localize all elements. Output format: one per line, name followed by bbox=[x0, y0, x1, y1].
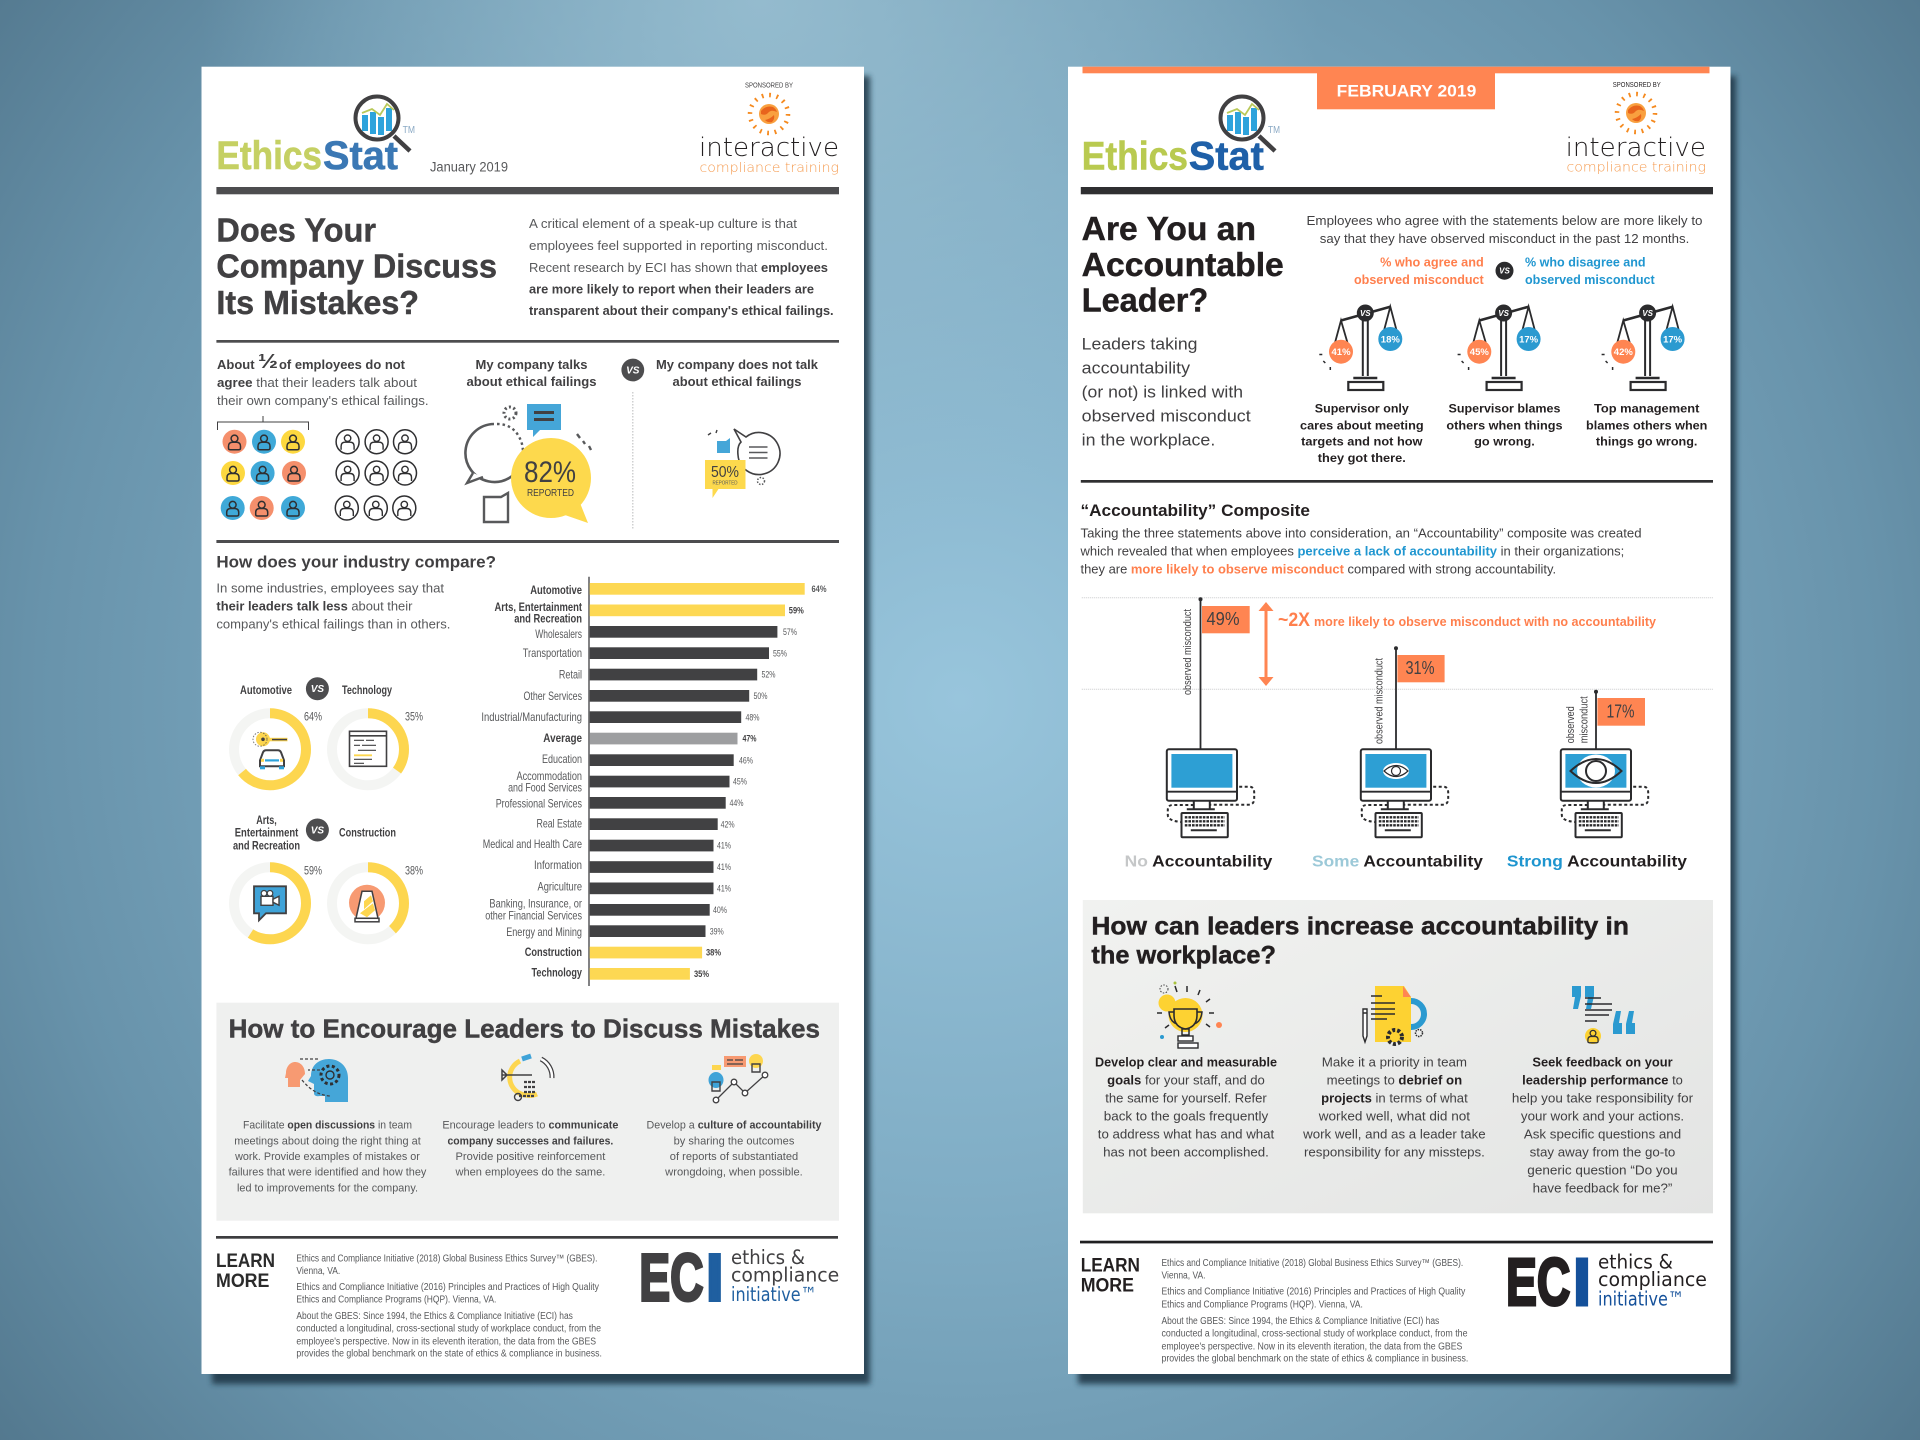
chart category labels: Agriculture bbox=[538, 880, 582, 894]
logo: ECI: compliance bbox=[731, 1264, 839, 1287]
chart category labels: Transportation bbox=[523, 646, 582, 660]
people icon grid bbox=[218, 416, 416, 520]
text: debrief on projects bbox=[1302, 1056, 1486, 1160]
donut: technology 35% bbox=[332, 709, 423, 785]
text: seek feedback: Ask specific questions and bbox=[1524, 1128, 1681, 1142]
scale 2: supervisor blames: 17% bbox=[1519, 334, 1539, 346]
comparison: arts vs construction: VS bbox=[311, 826, 324, 836]
chart category labels: Energy and Mining bbox=[506, 925, 582, 939]
title bbox=[1082, 210, 1284, 319]
references: Vienna, VA. bbox=[296, 1266, 340, 1277]
sponsor logo: interactive compliance training: SPONSORED BY bbox=[1613, 80, 1661, 89]
references: employee's perspective. Now in its eleventh iteration, the data from the GBES bbox=[1162, 1341, 1463, 1352]
title: Company Discuss bbox=[216, 248, 497, 284]
chart category labels: Real Estate bbox=[536, 817, 582, 831]
intro paragraph bbox=[529, 216, 834, 318]
logo: EthicsStat January: Ethics bbox=[216, 134, 322, 178]
stat text: about half of employees: their own company's ethical failings. bbox=[217, 393, 429, 408]
text block: industry intro: In some industries, employees say that bbox=[216, 581, 444, 596]
title bbox=[216, 212, 497, 321]
learn more label bbox=[216, 1251, 275, 1292]
callout: 2X more likely: more likely to observe misconduct with no accountability bbox=[1314, 615, 1656, 629]
chart value labels: 64% bbox=[812, 584, 826, 594]
heading: company does not talk: about ethical failings bbox=[672, 374, 802, 389]
scale 2: supervisor blames bbox=[1446, 304, 1563, 449]
references: Ethics and Compliance Initiative (2018) Global Business Ethics Survey™ (GBES). bbox=[296, 1254, 597, 1265]
comparison: arts vs construction: Construction bbox=[339, 826, 396, 840]
chart category labels: Banking, Insurance, or bbox=[489, 896, 582, 910]
logo: EthicsStat February: Ethics bbox=[1082, 134, 1188, 178]
text: culture of accountability: by sharing the outcomes bbox=[674, 1135, 795, 1147]
chart value labels: 50% bbox=[754, 691, 768, 701]
graphic: 50% reported: REPORTED bbox=[712, 480, 738, 486]
icon: heads with gear bbox=[285, 1059, 348, 1102]
chart value labels: 38% bbox=[706, 948, 721, 958]
legend: % who disagree and bbox=[1525, 256, 1646, 270]
intro paragraph: transparent about their company's ethical failings. bbox=[529, 303, 834, 318]
title: Does Your bbox=[216, 212, 376, 249]
page shadows bbox=[212, 76, 1736, 1384]
text block: industry intro bbox=[216, 581, 450, 631]
flag chart: strong accountability 17%: 17% bbox=[1606, 701, 1634, 721]
logo: ECI: initiative™ bbox=[1598, 1288, 1684, 1311]
chart category labels: other Financial Services bbox=[485, 908, 582, 922]
intro paragraph: employees feel supported in reporting misconduct. bbox=[529, 238, 828, 253]
learn more label bbox=[1081, 1256, 1140, 1297]
text: debrief on projects: responsibility for any missteps. bbox=[1304, 1146, 1485, 1160]
graphic: 82% reported bbox=[465, 404, 591, 523]
logo: EthicsStat January: TM bbox=[403, 125, 415, 136]
chart value labels: 44% bbox=[730, 798, 744, 808]
chart bars bbox=[590, 583, 805, 980]
scale 1: supervisor only cares: they got there. bbox=[1318, 451, 1406, 465]
panel: how to encourage leaders bbox=[216, 1003, 839, 1221]
title: Are You an bbox=[1082, 210, 1256, 247]
chart value labels: 35% bbox=[694, 969, 709, 979]
flag chart: some accountability 31% bbox=[1361, 646, 1448, 837]
scale 1: supervisor only cares: 41% bbox=[1331, 347, 1351, 358]
logo: EthicsStat January: Stat bbox=[323, 134, 398, 178]
intro paragraph: are more likely to report when their leaders are bbox=[529, 282, 814, 296]
scale 3: top management blames: Top management bbox=[1594, 402, 1699, 416]
legend: % who agree and bbox=[1380, 256, 1484, 270]
text: clear goals: has not been accomplished. bbox=[1103, 1146, 1269, 1160]
comparison: automotive vs technology bbox=[234, 677, 423, 785]
text: debrief on projects: meetings to debrief on bbox=[1327, 1074, 1462, 1088]
logo: ECI: ethics & bbox=[731, 1246, 805, 1269]
flag chart: strong accountability 17%: misconduct bbox=[1579, 696, 1591, 743]
intro text: Employees who agree with the statements below are more likely to bbox=[1306, 213, 1702, 228]
chart value labels: 47% bbox=[742, 734, 756, 744]
chart category labels bbox=[481, 583, 582, 980]
text: culture of accountability: wrongdoing, when possible. bbox=[664, 1167, 803, 1179]
heading: accountability composite: “Accountability” Composite bbox=[1080, 502, 1310, 520]
chart value labels: 57% bbox=[783, 627, 797, 637]
chart category labels: and Recreation bbox=[514, 612, 582, 626]
text block: composite description bbox=[1079, 526, 1642, 576]
references: provides the global benchmark on the state of ethics & compliance in business. bbox=[1162, 1354, 1468, 1365]
stat text: about half of employees: of employees do not bbox=[279, 357, 406, 372]
stat text: about half of employees: About bbox=[217, 357, 255, 372]
logo: EthicsStat January bbox=[216, 96, 415, 178]
chart value labels: 59% bbox=[789, 606, 804, 616]
chart category labels: Automotive bbox=[530, 583, 582, 597]
text: seek feedback: have feedback for me?” bbox=[1533, 1182, 1672, 1196]
flag chart: strong accountability 17%: observed bbox=[1565, 706, 1577, 743]
text: open discussions bbox=[229, 1120, 427, 1194]
comparison: automotive vs technology: Technology bbox=[342, 683, 392, 697]
scale 2: supervisor blames: go wrong. bbox=[1474, 435, 1535, 449]
icon: trophy bbox=[1157, 982, 1222, 1048]
text: debrief on projects: work well, and as a leader take bbox=[1302, 1128, 1486, 1142]
chart category labels: Retail bbox=[559, 668, 582, 682]
scale 1: supervisor only cares bbox=[1300, 304, 1424, 465]
text: open discussions: led to improvements for the company. bbox=[237, 1182, 418, 1194]
chart category labels: Other Services bbox=[524, 689, 582, 703]
scale 1: supervisor only cares: VS bbox=[1360, 309, 1371, 318]
chart category labels: Wholesalers bbox=[535, 627, 582, 641]
text block: industry intro: company's ethical failings than in others. bbox=[216, 616, 450, 631]
chart value labels bbox=[694, 584, 826, 979]
text: seek feedback: help you take responsibility for bbox=[1512, 1092, 1693, 1106]
logo: EthicsStat February: TM bbox=[1268, 125, 1280, 136]
donut: arts 59%: 59% bbox=[304, 863, 322, 877]
references: About the GBES: Since 1994, the Ethics & Compliance Initiative (ECI) has bbox=[296, 1311, 573, 1322]
caption: strong accountability: Strong Accountability bbox=[1507, 854, 1687, 871]
logo: ECI bbox=[639, 1240, 839, 1316]
text: communicate successes bbox=[442, 1120, 618, 1179]
chart value labels: 55% bbox=[773, 648, 787, 658]
text: debrief on projects: Make it a priority in team bbox=[1322, 1056, 1467, 1070]
chart category labels: Professional Services bbox=[496, 797, 582, 811]
text: culture of accountability: Develop a culture of accountability bbox=[646, 1120, 822, 1132]
panel heading: How can leaders increase accountability in bbox=[1091, 912, 1629, 940]
vs badge: VS bbox=[626, 366, 640, 376]
sponsor logo: interactive compliance training: interactive bbox=[699, 133, 839, 163]
scale 3: top management blames bbox=[1586, 304, 1707, 449]
text: seek feedback bbox=[1512, 1056, 1693, 1196]
text: debrief on projects: projects in terms of what bbox=[1321, 1092, 1468, 1106]
title: Leader? bbox=[1082, 282, 1208, 319]
panel: February 2019 infographic page bbox=[1068, 67, 1730, 1374]
icon: quotes and feedback bbox=[1572, 986, 1635, 1044]
text: open discussions: work. Provide examples of mistakes or bbox=[234, 1151, 420, 1163]
chart value labels: 40% bbox=[713, 905, 727, 915]
graphic: 50% reported: 50% bbox=[711, 464, 739, 481]
icon: light bulbs and line chart bbox=[708, 1054, 768, 1103]
logo: ECI: I bbox=[1573, 1245, 1591, 1320]
sponsor logo: interactive compliance training bbox=[699, 80, 839, 176]
references: Ethics and Compliance Initiative (2016) Principles and Practices of High Quality bbox=[1162, 1287, 1465, 1298]
chart category labels: and Food Services bbox=[508, 781, 582, 795]
learn more label: MORE bbox=[216, 1271, 269, 1292]
heading: company talks: about ethical failings bbox=[466, 374, 596, 389]
legend bbox=[1354, 256, 1656, 287]
flag chart: some accountability 31%: 31% bbox=[1406, 658, 1434, 678]
scale 3: top management blames: things go wrong. bbox=[1596, 435, 1697, 449]
banner: February 2019 bbox=[1082, 67, 1710, 109]
logo: ECI: EC bbox=[1506, 1245, 1570, 1320]
scale 3: top management blames: 42% bbox=[1614, 347, 1633, 358]
caption: some accountability: Some Accountability bbox=[1312, 854, 1483, 871]
sponsor logo: interactive compliance training: interactive bbox=[1566, 133, 1706, 163]
logo: ECI: ethics & bbox=[1598, 1250, 1673, 1273]
subtitle bbox=[1082, 334, 1251, 450]
stat text: about half of employees: agree that their leaders talk about bbox=[217, 375, 417, 390]
icon: document and gears bbox=[1363, 986, 1424, 1044]
text: seek feedback: your work and your actions. bbox=[1521, 1110, 1684, 1124]
flag chart: some accountability 31%: observed misconduct bbox=[1374, 658, 1386, 744]
subtitle: Leaders taking bbox=[1082, 334, 1198, 353]
references: About the GBES: Since 1994, the Ethics & Compliance Initiative (ECI) has bbox=[1162, 1316, 1439, 1327]
subtitle: (or not) is linked with bbox=[1082, 382, 1243, 401]
callout: 2X more likely: ~2X bbox=[1278, 610, 1310, 631]
flag chart: strong accountability 17% bbox=[1561, 690, 1648, 837]
text block: industry intro: their leaders talk less about their bbox=[216, 599, 413, 614]
legend: observed misconduct bbox=[1525, 273, 1656, 287]
sponsor logo: interactive compliance training: SPONSORED BY bbox=[745, 80, 793, 90]
text: open discussions: meetings about doing the right thing at bbox=[234, 1135, 421, 1147]
graphic: 82% reported: 82% bbox=[524, 456, 576, 489]
chart value labels: 48% bbox=[746, 712, 760, 722]
heading: industry compare: How does your industry compare? bbox=[216, 554, 496, 572]
callout: 2X more likely bbox=[1278, 610, 1656, 631]
references: conducted a longitudinal, cross-sectional study of workplace conduct, from the bbox=[1162, 1329, 1468, 1340]
text: seek feedback: Seek feedback on your bbox=[1532, 1056, 1673, 1070]
references: Ethics and Compliance Programs (HQP). Vienna, VA. bbox=[296, 1295, 496, 1306]
chart value labels: 41% bbox=[717, 884, 731, 894]
scale 1: supervisor only cares: targets and not how bbox=[1301, 435, 1423, 449]
donut: technology 35%: 35% bbox=[405, 709, 423, 723]
chart category labels: Medical and Health Care bbox=[483, 837, 582, 851]
logo: ECI: compliance bbox=[1598, 1268, 1707, 1291]
scale 3: top management blames: VS bbox=[1642, 309, 1654, 318]
issue date: January 2019 bbox=[430, 160, 508, 175]
chart value labels: 52% bbox=[762, 670, 776, 680]
references: conducted a longitudinal, cross-sectional study of workplace conduct, from the bbox=[296, 1324, 601, 1335]
text: clear goals bbox=[1095, 1056, 1277, 1160]
panel heading: How to Encourage Leaders to Discuss Mistakes bbox=[229, 1014, 820, 1044]
subtitle: accountability bbox=[1082, 358, 1191, 377]
title: Its Mistakes? bbox=[216, 284, 419, 321]
text block: composite description: they are more likely to observe misconduct compared with strong accountability. bbox=[1080, 562, 1556, 576]
arrow: 2X difference bbox=[1258, 602, 1274, 686]
chart category labels: Industrial/Manufacturing bbox=[481, 710, 582, 724]
donut: arts 59% bbox=[234, 863, 322, 939]
graphic: 50% reported bbox=[705, 429, 780, 498]
text: clear goals: back to the goals frequently bbox=[1104, 1110, 1269, 1124]
chart category labels: Information bbox=[534, 858, 582, 872]
text: clear goals: the same for yourself. Refer bbox=[1105, 1092, 1267, 1106]
intro paragraph: Recent research by ECI has shown that employees bbox=[529, 260, 828, 275]
sponsor logo: interactive compliance training: compliance training bbox=[1566, 160, 1706, 176]
heading: company does not talk: My company does not talk bbox=[656, 357, 819, 372]
sponsor logo: interactive compliance training bbox=[1566, 80, 1706, 176]
text: communicate successes: Encourage leaders to communicate bbox=[442, 1120, 618, 1132]
scale 1: supervisor only cares: cares about meeting bbox=[1300, 418, 1424, 432]
text: debrief on projects: worked well, what did not bbox=[1318, 1110, 1471, 1124]
legend: observed misconduct bbox=[1354, 273, 1485, 287]
legend: VS bbox=[1499, 267, 1510, 276]
text: culture of accountability bbox=[646, 1120, 822, 1179]
logo: EthicsStat February bbox=[1082, 96, 1280, 178]
heading: company talks: My company talks bbox=[476, 357, 588, 372]
text: open discussions: Facilitate open discussions in team bbox=[243, 1120, 412, 1132]
panel: January 2019 infographic page bbox=[202, 67, 864, 1374]
chart value labels: 42% bbox=[721, 819, 735, 829]
references bbox=[1162, 1258, 1468, 1365]
intro paragraph: A critical element of a speak-up culture is that bbox=[529, 216, 797, 231]
scale 2: supervisor blames: 45% bbox=[1470, 347, 1489, 358]
references: Ethics and Compliance Initiative (2016) Principles and Practices of High Quality bbox=[296, 1282, 599, 1293]
references: Ethics and Compliance Initiative (2018) Global Business Ethics Survey™ (GBES). bbox=[1162, 1258, 1463, 1269]
chart value labels: 46% bbox=[739, 755, 753, 765]
vs badge bbox=[621, 359, 644, 381]
chart category labels: Arts, Entertainment bbox=[494, 600, 582, 614]
text block: composite description: which revealed that when employees perceive a lack of accountability in their organizations; bbox=[1079, 544, 1624, 558]
chart category labels: Education bbox=[542, 752, 582, 766]
text: seek feedback: stay away from the go-to bbox=[1530, 1146, 1675, 1160]
text: culture of accountability: of reports of substantiated bbox=[670, 1151, 798, 1163]
scale 1: supervisor only cares: 18% bbox=[1381, 334, 1400, 346]
text: seek feedback: generic question “Do you bbox=[1527, 1164, 1678, 1178]
logo: ECI: EC bbox=[639, 1240, 704, 1316]
comparison: automotive vs technology: VS bbox=[311, 684, 324, 695]
chart value labels: 41% bbox=[717, 862, 731, 872]
flag chart: no accountability 49%: observed misconduct bbox=[1182, 609, 1194, 695]
stat text: about half of employees: ½ bbox=[258, 351, 278, 373]
caption: no accountability: No Accountability bbox=[1125, 854, 1273, 871]
title: Accountable bbox=[1082, 246, 1284, 283]
icon: target ring bbox=[502, 1056, 552, 1100]
references: Ethics and Compliance Programs (HQP). Vienna, VA. bbox=[1162, 1299, 1363, 1310]
learn more label: LEARN bbox=[1081, 1256, 1140, 1277]
scale 3: top management blames: blames others when bbox=[1586, 418, 1707, 432]
logo: ECI bbox=[1506, 1245, 1707, 1320]
intro text bbox=[1306, 213, 1702, 246]
references: Vienna, VA. bbox=[1162, 1270, 1206, 1281]
comparison: arts vs construction: Entertainment bbox=[235, 826, 298, 840]
scale 2: supervisor blames: VS bbox=[1498, 309, 1510, 318]
scale 2: supervisor blames: Supervisor blames bbox=[1449, 402, 1561, 416]
heading: company talks bbox=[466, 357, 596, 389]
text: communicate successes: Provide positive reinforcement bbox=[456, 1151, 605, 1163]
comparison: automotive vs technology: Automotive bbox=[240, 683, 292, 697]
text: clear goals: goals for your staff, and do bbox=[1107, 1074, 1265, 1088]
text: clear goals: Develop clear and measurable bbox=[1095, 1056, 1277, 1070]
comparison: arts vs construction bbox=[233, 813, 423, 939]
references bbox=[296, 1254, 602, 1360]
learn more label: MORE bbox=[1081, 1276, 1134, 1297]
banner: February 2019: FEBRUARY 2019 bbox=[1337, 83, 1476, 101]
chart category labels: Construction bbox=[525, 945, 582, 959]
text block: composite description: Taking the three statements above into consideration, an “Accountability” composite was created bbox=[1080, 526, 1642, 540]
stat text: about half of employees bbox=[217, 351, 429, 408]
scale 2: supervisor blames: others when things bbox=[1446, 418, 1563, 432]
scale 1: supervisor only cares: Supervisor only bbox=[1315, 402, 1409, 416]
bar chart: industries bbox=[481, 577, 826, 986]
text: communicate successes: when employees do the same. bbox=[454, 1167, 605, 1179]
chart category labels: Average bbox=[543, 731, 582, 745]
donut: automotive 64% bbox=[234, 709, 322, 785]
references: employee's perspective. Now in its eleventh iteration, the data from the GBES bbox=[296, 1336, 596, 1347]
intro text: say that they have observed misconduct in the past 12 months. bbox=[1320, 231, 1689, 246]
donut: construction 38% bbox=[332, 863, 423, 939]
comparison: arts vs construction: and Recreation bbox=[233, 838, 300, 852]
sponsor logo: interactive compliance training: compliance training bbox=[700, 160, 839, 176]
logo: ECI: initiative™ bbox=[731, 1283, 817, 1306]
chart value labels: 39% bbox=[710, 926, 724, 936]
logo: ECI: I bbox=[706, 1240, 724, 1316]
panel heading bbox=[1091, 912, 1629, 969]
text: communicate successes: company successes and failures. bbox=[448, 1135, 613, 1147]
chart value labels: 45% bbox=[733, 777, 747, 787]
chart category labels: Technology bbox=[532, 966, 582, 980]
subtitle: observed misconduct bbox=[1082, 407, 1251, 426]
learn more label: LEARN bbox=[216, 1251, 275, 1272]
text: open discussions: failures that were identified and how they bbox=[229, 1167, 427, 1179]
text: clear goals: to address what has and what bbox=[1098, 1128, 1275, 1142]
scale 3: top management blames: 17% bbox=[1663, 334, 1683, 346]
text: seek feedback: leadership performance to bbox=[1522, 1074, 1683, 1088]
flag chart: no accountability 49% bbox=[1167, 597, 1254, 837]
chart category labels: Accommodation bbox=[516, 769, 582, 783]
logo: EthicsStat February: Stat bbox=[1189, 134, 1264, 178]
donut: construction 38%: 38% bbox=[405, 863, 423, 877]
comparison: arts vs construction: Arts, bbox=[256, 813, 277, 827]
subtitle: in the workplace. bbox=[1082, 431, 1215, 450]
references: provides the global benchmark on the state of ethics & compliance in business. bbox=[296, 1349, 602, 1360]
heading: company does not talk bbox=[656, 357, 819, 389]
donut: automotive 64%: 64% bbox=[304, 709, 322, 723]
panel: how can leaders increase accountability bbox=[1083, 900, 1713, 1213]
chart value labels: 41% bbox=[717, 841, 731, 851]
flag chart: no accountability 49%: 49% bbox=[1206, 609, 1240, 629]
panel heading: the workplace? bbox=[1091, 941, 1276, 969]
graphic: 82% reported: REPORTED bbox=[527, 487, 574, 499]
